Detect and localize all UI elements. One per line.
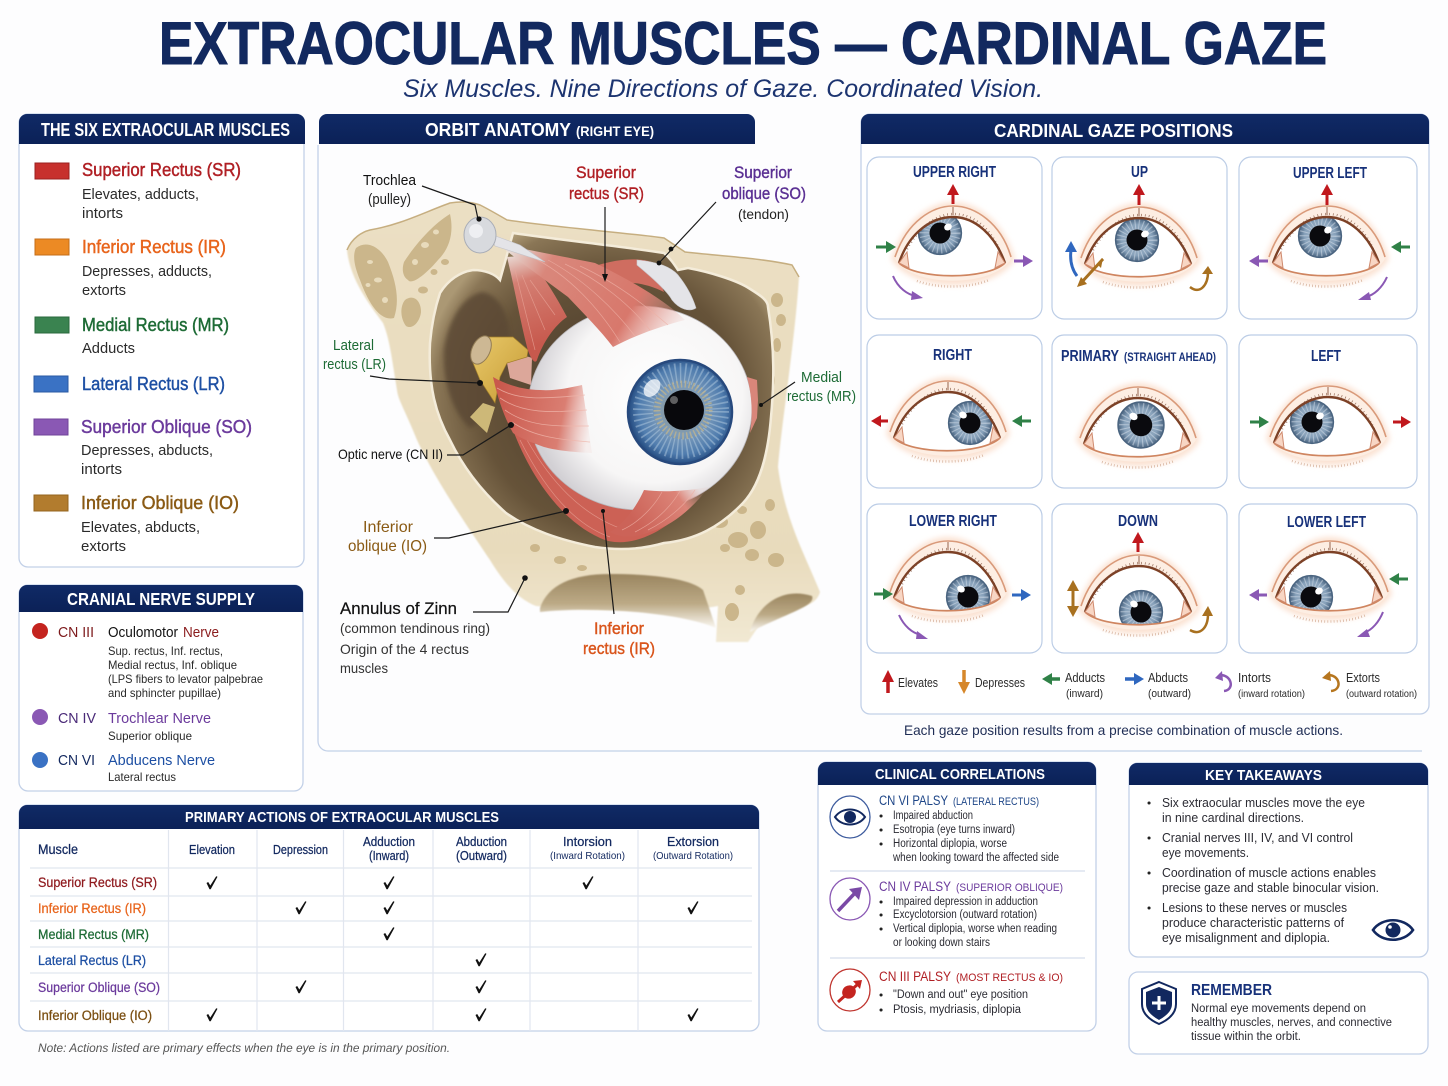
row: inferior rectus: [38, 901, 698, 916]
label: annulus of Zinn: muscles: [340, 660, 388, 676]
table header: (Outward): [456, 848, 507, 863]
orbital cavity: [430, 233, 773, 549]
item: inferior oblique: Inferior Oblique (IO): [81, 493, 239, 513]
row: medial rectus: Medial Rectus (MR): [38, 927, 149, 942]
palsy: CN IV: [830, 878, 1063, 949]
table header: [38, 834, 733, 863]
item: medial rectus: [35, 315, 229, 357]
label: inferior oblique: Inferior: [363, 519, 414, 536]
palsy: CN VI: Impaired abduction: [893, 810, 973, 822]
panel: orbit anatomy frame: [318, 145, 1422, 751]
palsy: CN VI: when looking toward the affected side: [892, 852, 1059, 864]
gaze: right: RIGHT: [933, 347, 972, 364]
illustration: orbit and eyeball: [347, 202, 820, 642]
nerve: CN III: Nerve: [183, 625, 219, 641]
gaze: down: DOWN: [1118, 513, 1158, 530]
nerve: CN IV: Superior oblique: [108, 729, 192, 743]
label: lateral rectus: rectus (LR): [323, 357, 386, 373]
eyeball: [528, 306, 752, 510]
palsy: CN VI: Horizontal diplopia, worse: [893, 838, 1007, 850]
label: superior oblique: (tendon): [738, 206, 789, 222]
remember text: [1191, 1003, 1392, 1043]
nerve: CN VI: [32, 752, 215, 784]
nerve: CN IV: [32, 709, 211, 743]
label: lateral rectus: [323, 338, 386, 373]
label: medial rectus: Medial: [801, 370, 842, 386]
iris and pupil: [628, 360, 732, 464]
table header: (Inward Rotation): [550, 850, 625, 862]
gaze: lower right: LOWER RIGHT: [909, 513, 997, 530]
palsy: CN IV: or looking down stairs: [893, 937, 990, 949]
nerve: CN III: (LPS fibers to levator palpebrae: [108, 672, 263, 686]
label: inferior rectus: [583, 620, 655, 658]
palsy: CN VI: CN VI PALSY: [879, 793, 948, 808]
label: superior rectus: [569, 164, 644, 203]
table header: (Inward): [369, 848, 409, 863]
item: medial rectus: Adducts: [82, 340, 135, 357]
label: inferior oblique: [348, 519, 427, 555]
label: annulus of Zinn: (common tendinous ring): [340, 620, 490, 636]
panel: primary actions table: [19, 805, 759, 1031]
remember text: tissue within the orbit.: [1191, 1031, 1301, 1043]
row: inferior rectus: Inferior Rectus (IR): [38, 901, 146, 916]
item: inferior oblique: extorts: [81, 538, 126, 555]
label: medial rectus: rectus (MR): [787, 389, 856, 405]
palsy: CN VI: (LATERAL RECTUS): [953, 796, 1039, 808]
palsy: CN III: [830, 969, 1063, 1016]
caption: Each gaze position results from a precise combination of muscle actions.: [904, 722, 1343, 738]
palsy: CN VI: Esotropia (eye turns inward): [893, 824, 1015, 836]
palsy: CN IV: CN IV PALSY: [879, 879, 951, 894]
legend: Abducts: [1148, 671, 1188, 685]
takeaways list: Cranial nerves III, IV, and VI control: [1162, 830, 1353, 845]
nerve: CN IV: CN IV: [58, 711, 96, 727]
optic nerve: [467, 333, 532, 433]
gaze: lower left: [1239, 504, 1417, 653]
table header: Abduction: [456, 834, 507, 849]
panel: cranial nerve supply: [19, 585, 303, 791]
palsy: CN IV: Excyclotorsion (outward rotation): [893, 909, 1037, 921]
heading: orbit anatomy: ORBIT ANATOMY: [425, 120, 571, 140]
item: superior rectus: intorts: [82, 205, 123, 222]
gaze: upper left: UPPER LEFT: [1293, 165, 1367, 182]
nerve: CN III: Medial rectus, Inf. oblique: [108, 658, 237, 672]
panel: cardinal gaze positions: [861, 114, 1429, 714]
label: trochlea: [363, 173, 417, 208]
item: inferior oblique: [34, 493, 239, 555]
nerve: CN VI: Lateral rectus: [108, 770, 176, 784]
row: superior rectus: Superior Rectus (SR): [38, 875, 157, 890]
row: medial rectus: [38, 927, 394, 942]
panel: key takeaways: [1129, 763, 1428, 957]
item: superior oblique: intorts: [81, 461, 122, 478]
table header: Adduction: [363, 834, 415, 849]
takeaways list: eye misalignment and diplopia.: [1162, 930, 1330, 945]
item: superior oblique: [34, 417, 252, 478]
spongy bone: [354, 214, 786, 621]
nerve: CN III: and sphincter pupillae): [108, 686, 221, 700]
takeaways list: Lesions to these nerves or muscles: [1162, 900, 1347, 915]
row: superior rectus: [38, 875, 594, 890]
grid lines: [30, 830, 752, 1031]
legend: Intorts: [1238, 671, 1271, 685]
subtitle: Six Muscles. Nine Directions of Gaze. Coordinated Vision.: [403, 75, 1043, 103]
heading: orbit anatomy: [319, 114, 755, 144]
takeaways list: Coordination of muscle actions enables: [1162, 865, 1376, 880]
nerve: CN III: Sup. rectus, Inf. rectus,: [108, 644, 223, 658]
label: trochlea: Trochlea: [363, 173, 417, 189]
item: lateral rectus: Lateral Rectus (LR): [82, 374, 225, 394]
leader lines: [370, 186, 795, 614]
lateral rectus muscle: [493, 377, 592, 453]
table header: (Outward Rotation): [653, 850, 733, 862]
gaze: lower right: [867, 504, 1042, 653]
gaze: upper left: [1239, 157, 1417, 319]
label: superior oblique: oblique (SO): [722, 185, 806, 203]
palsy: CN III: "Down and out" eye position: [893, 989, 1028, 1001]
heading: key takeaways: KEY TAKEAWAYS: [1205, 767, 1322, 784]
palsy: CN VI: [830, 793, 1059, 864]
palsy: CN IV: Vertical diplopia, worse when reading: [893, 923, 1057, 935]
label: superior oblique: Superior: [734, 164, 792, 182]
row: superior oblique: Superior Oblique (SO): [38, 980, 160, 995]
icon: eye: [1373, 920, 1413, 940]
nerve: CN III: [32, 623, 263, 700]
superior oblique tendon: [637, 260, 696, 310]
remember text: Normal eye movements depend on: [1191, 1003, 1366, 1015]
item: inferior rectus: [35, 237, 226, 299]
palsy: CN III: (MOST RECTUS & IO): [956, 972, 1063, 984]
item: superior rectus: Elevates, adducts,: [82, 186, 199, 203]
label: inferior rectus: rectus (IR): [583, 640, 655, 658]
takeaways list: produce characteristic patterns of: [1162, 915, 1344, 930]
takeaways list: [1149, 795, 1379, 945]
table header: Depression: [273, 842, 328, 857]
label: lateral rectus: Lateral: [333, 338, 374, 354]
label: annulus of Zinn: Origin of the 4 rectus: [340, 641, 469, 657]
item: inferior oblique: Elevates, abducts,: [81, 519, 200, 536]
item: superior oblique: Depresses, abducts,: [81, 442, 213, 459]
nerve: CN VI: Abducens Nerve: [108, 753, 215, 769]
label: superior oblique: [722, 164, 806, 222]
heading: remember: REMEMBER: [1191, 982, 1272, 999]
muscles behind the globe: [507, 256, 682, 542]
item: superior rectus: [35, 160, 241, 222]
heading: clinical correlations: CLINICAL CORRELATIONS: [875, 766, 1045, 783]
legend: [882, 670, 1417, 700]
bony orbit: [347, 202, 820, 642]
panel: the six extraocular muscles: [19, 114, 305, 567]
legend: (inward): [1066, 688, 1103, 700]
heading: cranial nerve supply: CRANIAL NERVE SUPPLY: [67, 589, 255, 609]
item: inferior rectus: extorts: [82, 282, 126, 299]
label: superior rectus: Superior: [576, 164, 636, 182]
label: inferior oblique: oblique (IO): [348, 538, 427, 555]
row: superior oblique: [38, 980, 486, 995]
row: lateral rectus: Lateral Rectus (LR): [38, 953, 146, 968]
heading: primary actions: PRIMARY ACTIONS OF EXTRAOCULAR MUSCLES: [185, 810, 499, 826]
label: superior rectus: rectus (SR): [569, 185, 644, 203]
palsy: CN III: Ptosis, mydriasis, diplopia: [893, 1004, 1022, 1016]
label: medial rectus: [787, 370, 856, 405]
item: superior oblique: Superior Oblique (SO): [81, 417, 252, 437]
gaze: primary: [1052, 335, 1227, 488]
item: inferior rectus: Inferior Rectus (IR): [82, 237, 226, 257]
palsy: CN IV: (SUPERIOR OBLIQUE): [956, 882, 1063, 894]
table header: Extorsion: [667, 834, 719, 849]
gaze: left: LEFT: [1311, 348, 1341, 365]
gaze: lower left: LOWER LEFT: [1287, 514, 1366, 531]
heading: six muscles: THE SIX EXTRAOCULAR MUSCLES: [41, 120, 290, 140]
remember text: healthy muscles, nerves, and connective: [1191, 1017, 1392, 1029]
gaze: up: UP: [1131, 164, 1148, 181]
gaze: right: [867, 335, 1042, 488]
takeaways list: precise gaze and stable binocular vision.: [1162, 880, 1379, 895]
takeaways list: in nine cardinal directions.: [1162, 810, 1304, 825]
row: inferior oblique: Inferior Oblique (IO): [38, 1008, 152, 1023]
icon: shield: [1142, 982, 1176, 1024]
item: inferior rectus: Depresses, adducts,: [82, 263, 212, 280]
trochlea: [464, 217, 545, 262]
legend: Depresses: [975, 676, 1025, 690]
table header: Muscle: [38, 842, 78, 857]
heading: orbit anatomy: (RIGHT EYE): [576, 123, 654, 139]
label: optic nerve: Optic nerve (CN II): [338, 446, 443, 462]
legend: (outward rotation): [1346, 689, 1417, 700]
inferior rectus muscle: [610, 487, 709, 536]
medial rectus muscle: [747, 377, 758, 433]
legend: Adducts: [1065, 671, 1105, 685]
row: lateral rectus: [38, 953, 486, 968]
gaze: primary: (STRAIGHT AHEAD): [1124, 352, 1216, 364]
gaze: up: [1052, 157, 1227, 319]
item: medial rectus: Medial Rectus (MR): [82, 315, 229, 335]
panel: clinical correlations: [818, 762, 1096, 1031]
legend: (inward rotation): [1238, 689, 1305, 700]
label: trochlea: (pulley): [368, 192, 411, 208]
gaze: down: [1052, 504, 1227, 653]
row: inferior oblique: [38, 1008, 698, 1023]
panel: remember: [1129, 972, 1428, 1054]
palsy: CN III: CN III PALSY: [879, 969, 951, 984]
nerve: CN III: CN III: [58, 625, 94, 641]
label: annulus of Zinn: [340, 599, 490, 676]
takeaways list: eye movements.: [1162, 845, 1249, 860]
heading: cardinal gaze: CARDINAL GAZE POSITIONS: [994, 120, 1233, 141]
nerve: CN IV: Trochlear Nerve: [108, 711, 211, 727]
label: annulus of Zinn: Annulus of Zinn: [340, 599, 457, 618]
table header: Intorsion: [563, 834, 612, 849]
item: superior rectus: Superior Rectus (SR): [82, 160, 241, 180]
takeaways list: Six extraocular muscles move the eye: [1162, 795, 1365, 810]
nerve: CN III: Oculomotor: [108, 625, 178, 641]
gaze: upper right: [867, 157, 1042, 319]
gaze: upper right: UPPER RIGHT: [913, 164, 996, 181]
palsy: CN IV: Impaired depression in adduction: [893, 896, 1038, 908]
gaze: primary: PRIMARY: [1061, 348, 1120, 365]
legend: Elevates: [898, 676, 938, 690]
legend: Extorts: [1346, 671, 1380, 685]
superior rectus muscle: [498, 244, 685, 347]
table header: Elevation: [189, 842, 235, 857]
gaze: left: [1239, 335, 1417, 488]
nerve: CN VI: CN VI: [58, 753, 95, 769]
label: inferior rectus: Inferior: [594, 620, 644, 638]
legend: (outward): [1148, 688, 1191, 700]
table note: Note: Actions listed are primary effects when the eye is in the primary position.: [38, 1043, 450, 1055]
